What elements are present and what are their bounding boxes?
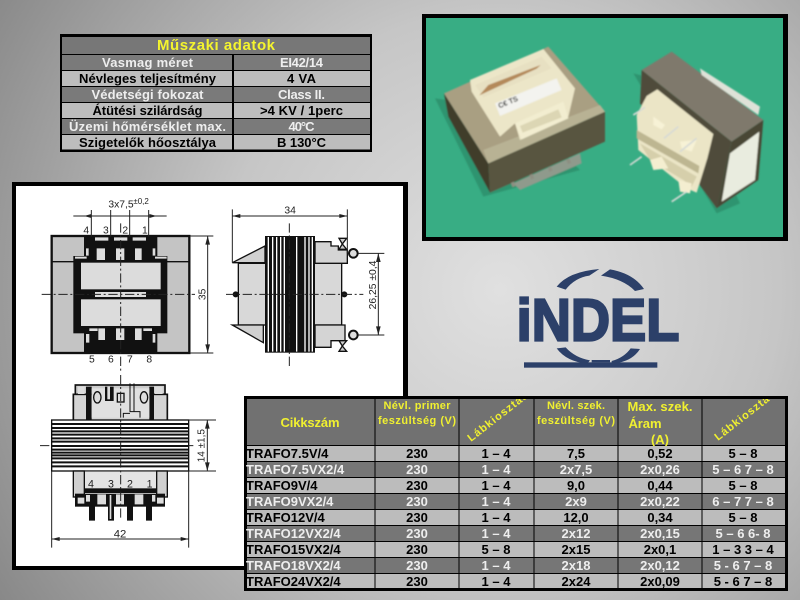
table rows: TRAFO12V/4: [246, 510, 326, 525]
drawing: bottom view: 4: [88, 478, 94, 490]
table rows: 5 – 8: [729, 478, 757, 493]
table rows: 2x0,22: [640, 494, 680, 509]
table rows: 5 – 6 7 – 8: [712, 462, 774, 477]
panel: technical data table: Szigetelők hőosztálya: [79, 135, 217, 150]
table rows: 2x24: [562, 574, 591, 589]
table rows: 9,0: [567, 478, 585, 493]
drawing: bottom view: 2: [127, 478, 133, 490]
panel: technical data table: Névleges teljesítmény: [79, 71, 217, 86]
table rows: 2x0,26: [640, 462, 680, 477]
table header: Lábkiosztás: [712, 388, 778, 443]
panel: product photo: [422, 14, 788, 241]
table rows: 2x0,09: [640, 574, 680, 589]
drawing: bottom view: 42: [114, 528, 126, 540]
table rows: 0,44: [647, 478, 673, 493]
table rows: 1 – 4: [482, 558, 511, 573]
table rows: 230: [406, 542, 428, 557]
table rows: 1 – 4: [482, 526, 511, 541]
drawing: bottom view: [40, 375, 216, 548]
table rows: 1 – 4: [482, 478, 511, 493]
panel: technical data table: 4 VA: [287, 71, 317, 86]
table rows: 12,0: [563, 510, 589, 525]
panel: technical data table: Class II.: [278, 87, 325, 102]
table rows: 2x18: [562, 558, 590, 573]
table header: Áram: [628, 416, 662, 431]
table header: feszültség (V): [378, 415, 456, 427]
table rows: TRAFO24VX2/4: [246, 574, 341, 589]
table rows: 7,5: [567, 446, 585, 461]
table rows: 5 – 8: [482, 542, 510, 557]
table rows: 230: [406, 526, 428, 541]
table rows: 6 – 7 7 – 8: [712, 494, 774, 509]
drawing: front view: ±0,2: [133, 197, 149, 206]
panel: technical data table: B 130°C: [277, 135, 327, 150]
table rows: 2x0,15: [640, 526, 680, 541]
table rows: 2x0,12: [640, 558, 680, 573]
table rows: 2x0,1: [644, 542, 676, 557]
table header: Lábkiosztás: [465, 389, 531, 444]
drawing: bottom view: 3: [108, 478, 114, 490]
table rows: 230: [406, 446, 428, 461]
table rows: [246, 445, 785, 589]
panel: technical data table: Üzemi hőmérséklet max.: [69, 119, 226, 134]
table rows: 1 – 4: [482, 462, 511, 477]
photo: two transformers: C€ TS: [497, 94, 519, 110]
table rows: 2x12: [562, 526, 590, 541]
table header: Névl. szek.: [547, 400, 605, 412]
table rows: 5 – 8: [729, 446, 757, 461]
left transformer: [444, 47, 605, 163]
panel: technical data table: Műszaki adatok: [157, 37, 276, 54]
table rows: TRAFO18VX2/4: [246, 558, 341, 573]
table rows: TRAFO12VX2/4: [246, 526, 341, 541]
right transformer: [642, 52, 763, 142]
table rows: 0,52: [647, 446, 673, 461]
table rows: 1 – 4: [482, 510, 511, 525]
drawing: front view: 6: [108, 355, 114, 366]
table rows: 5 - 6 7 – 8: [714, 574, 772, 589]
table rows: 2x7,5: [560, 462, 592, 477]
drawing: front view: 3x7,5: [108, 200, 134, 211]
drawing: front view: 4: [83, 225, 89, 236]
table rows: 5 – 8: [729, 510, 757, 525]
panel: technical data table: [60, 34, 372, 152]
table rows: 1 – 4: [482, 494, 511, 509]
panel: dimensional drawing: [12, 182, 408, 570]
drawing: side view: 26,25 ±0,4: [368, 260, 379, 309]
panel: technical data table: EI42/14: [280, 55, 324, 70]
drawing: front view: 1: [142, 225, 148, 236]
panel: technical data table: Vasmag méret: [102, 55, 194, 70]
drawing: front view: 35: [197, 288, 208, 300]
panel: product table: [244, 388, 788, 591]
photo: two transformers: [435, 47, 763, 213]
drawing: front view: 7: [127, 355, 133, 366]
table rows: 230: [406, 574, 428, 589]
table rows: 230: [406, 558, 428, 573]
table header: Névl. primer: [384, 400, 451, 412]
table rows: 5 – 6 6- 8: [716, 526, 770, 541]
table rows: TRAFO15VX2/4: [246, 542, 341, 557]
table rows: 1 – 3 3 – 4: [712, 542, 774, 557]
table rows: 1 – 4: [482, 574, 511, 589]
logo: INDEL: iNDEL: [517, 286, 679, 353]
table rows: TRAFO7.5VX2/4: [246, 462, 345, 477]
panel: technical data table: >4 KV / 1perc: [260, 103, 343, 118]
table rows: 230: [406, 510, 428, 525]
drawing: side view: [226, 206, 384, 367]
table rows: 5 - 6 7 – 8: [714, 558, 772, 573]
drawing: front view: [42, 197, 213, 373]
table rows: TRAFO7.5V/4: [246, 446, 329, 461]
table rows: 230: [406, 462, 428, 477]
drawing: front view: 2: [122, 225, 128, 236]
table header: feszültség (V): [537, 415, 615, 427]
drawing: front view: 5: [89, 355, 95, 366]
table rows: 230: [406, 494, 428, 509]
table rows: TRAFO9V/4: [246, 478, 318, 493]
table rows: 0,34: [647, 510, 673, 525]
panel: technical data table: 40°C: [288, 119, 315, 134]
table header: Max. szek.: [628, 399, 692, 414]
table header: Cikkszám: [280, 415, 340, 430]
table rows: 2x15: [562, 542, 590, 557]
table header: [247, 399, 785, 446]
drawing: side view: 34: [284, 206, 296, 217]
panel: technical data table: Védetségi fokozat: [92, 87, 204, 102]
table rows: 230: [406, 478, 428, 493]
table rows: TRAFO9VX2/4: [246, 494, 334, 509]
panel: technical data table: Átütési szilárdság: [92, 103, 203, 118]
logo: INDEL: [517, 269, 679, 368]
drawing: bottom view: 14 ±1,5: [197, 429, 208, 462]
drawing: front view: 8: [146, 355, 152, 366]
table header: (A): [651, 432, 669, 447]
table rows: 1 – 4: [482, 446, 511, 461]
table rows: 2x9: [565, 494, 587, 509]
drawing: front view: 3: [103, 225, 109, 236]
drawing: bottom view: 1: [147, 478, 153, 490]
